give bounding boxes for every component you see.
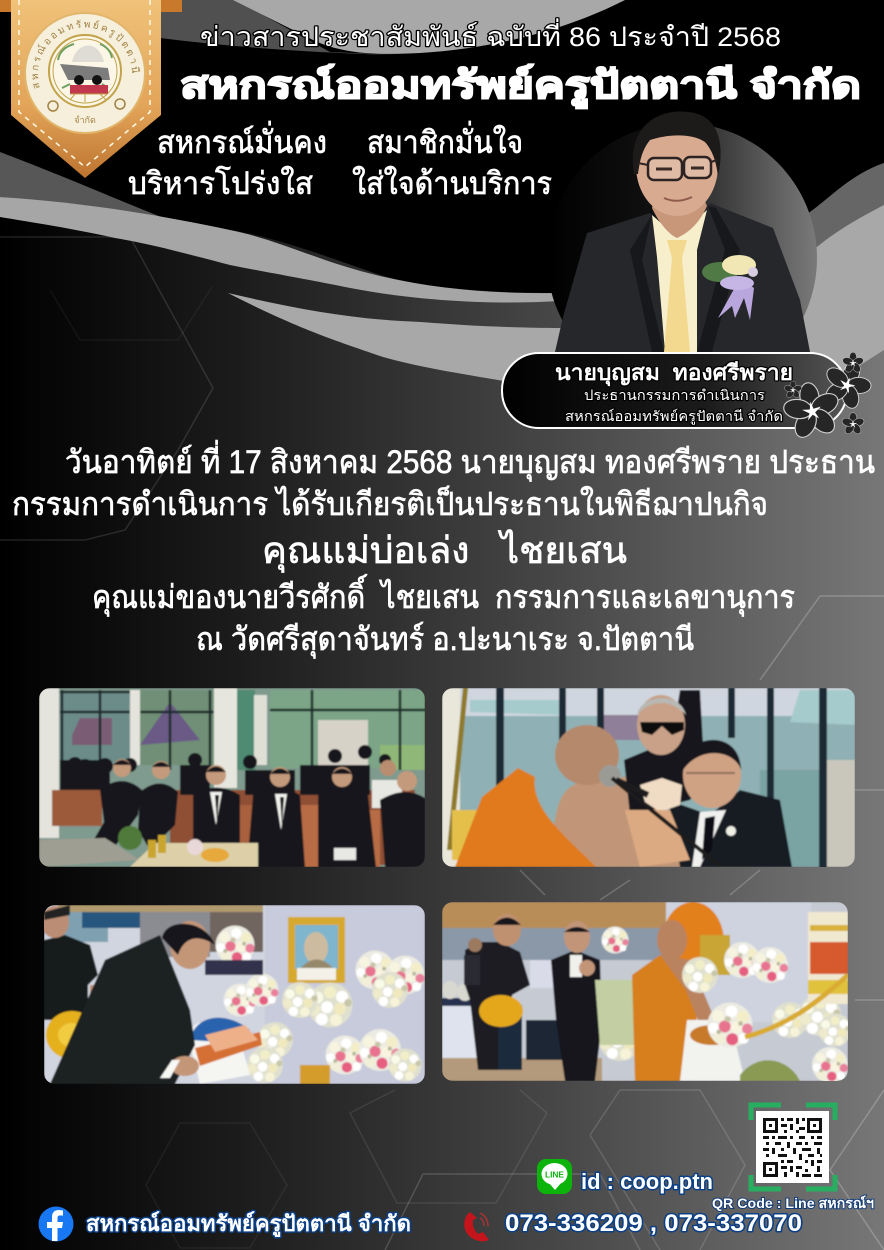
plumeria flowers — [777, 352, 879, 444]
phone numbers: 073-336209 , 073-337070 — [505, 1210, 802, 1237]
QR caption: QR Code : Line สหกรณ์ฯ — [712, 1195, 874, 1211]
announcement text: กรรมการดำเนินการ ได้รับเกียรติเป็นประธานในพิธีฌาปนกิจ — [12, 485, 768, 522]
announcement text: คุณแม่บ่อเล่ง ไชยเสน — [262, 529, 627, 573]
slogans: ใส่ใจด้านบริการ — [352, 166, 552, 201]
Facebook page name: สหกรณ์ออมทรัพย์ครูปัตตานี จำกัด — [86, 1211, 411, 1238]
LINE icon — [537, 1159, 572, 1194]
logo seal: สหกรณ์ออมทรัพย์ครูปัตตานี — [32, 20, 140, 89]
name plate: ประธานกรรมการดำเนินการ — [584, 387, 765, 403]
top swoosh: dark grey — [160, 0, 395, 55]
portrait: chairman — [555, 111, 810, 352]
LINE icon: LINE — [545, 1170, 565, 1180]
ribbon badge with logo — [0, 0, 182, 178]
left swoosh: dark grey — [0, 152, 228, 242]
slogans: สมาชิกมั่นใจ — [367, 121, 523, 160]
logo seal — [24, 12, 146, 134]
photo 4: monk at funeral altar — [442, 902, 852, 1083]
photo 3: bowing to funeral altar — [41, 905, 425, 1084]
header: cooperative name: สหกรณ์ออมทรัพย์ครูปัตตานี จำกัด — [180, 64, 861, 109]
phone icon — [464, 1212, 489, 1241]
portrait backdrop circle — [547, 123, 817, 393]
announcement text — [12, 440, 875, 659]
black header area — [0, 0, 884, 293]
right swoosh: mid grey band — [780, 163, 884, 280]
Facebook icon — [38, 1206, 74, 1242]
QR code — [751, 1105, 835, 1189]
announcement text: คุณแม่ของนายวีรศักดิ์ ไชยเสน กรรมการและเลขานุการ — [92, 574, 795, 617]
logo seal: จำกัด — [74, 115, 96, 125]
slogans: บริหารโปร่งใส — [128, 166, 313, 201]
slogans: สหกรณ์มั่นคง — [157, 121, 327, 160]
name plate — [502, 353, 847, 428]
top swoosh: light grey — [233, 0, 625, 54]
photo 1: seated attendees — [39, 688, 425, 867]
lower swoosh: light grey — [228, 205, 884, 392]
photo 2: monk receiving offering — [442, 688, 855, 868]
name plate: สหกรณ์ออมทรัพย์ครูปัตตานี จำกัด — [565, 408, 783, 425]
slogans — [128, 121, 552, 201]
announcement text: ณ วัดศรีสุดาจันทร์ อ.ปะนาเระ จ.ปัตตานี — [196, 621, 694, 659]
name plate: นายบุญสม ทองศรีพราย — [555, 360, 793, 387]
LINE id: id : coop.ptn — [581, 1169, 713, 1194]
left swoosh: light grey — [0, 197, 560, 303]
header: newsletter issue line: ข่าวสารประชาสัมพันธ์ ฉบับที่ 86 ประจำปี 2568 — [200, 18, 781, 52]
